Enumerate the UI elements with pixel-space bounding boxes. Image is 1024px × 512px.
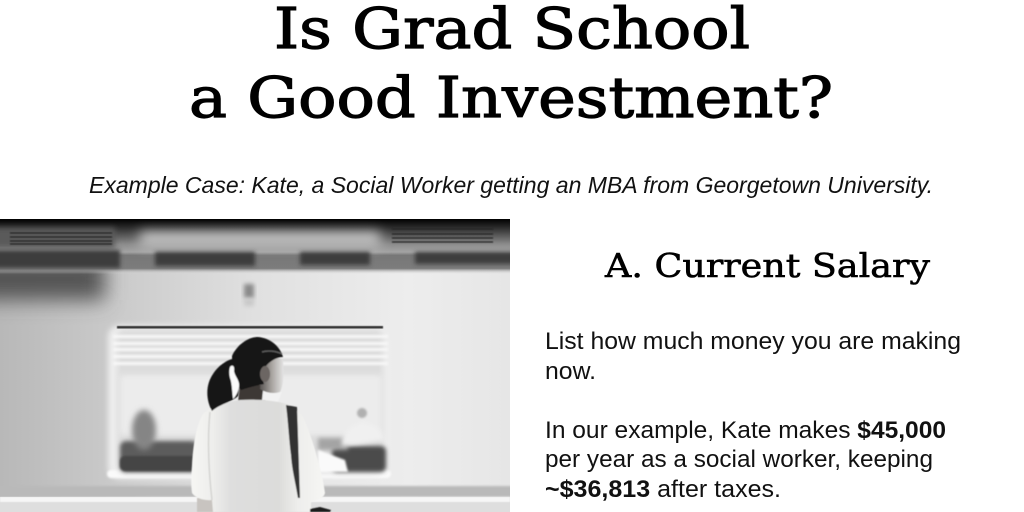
body text bbox=[545, 328, 961, 503]
lower platform edge bbox=[0, 486, 515, 497]
bag strap bbox=[286, 405, 300, 498]
section heading: A. Current Salary bbox=[604, 246, 930, 285]
sweater bbox=[191, 400, 325, 512]
roof highlight bbox=[140, 232, 380, 246]
train window bbox=[107, 325, 391, 479]
passenger right bbox=[357, 408, 367, 418]
hair bbox=[232, 337, 283, 390]
body text: now. bbox=[545, 358, 596, 385]
hair highlight bbox=[262, 351, 282, 354]
face bbox=[260, 357, 284, 393]
door sign bbox=[244, 284, 254, 298]
train roof band bbox=[0, 219, 510, 274]
white hair tie bbox=[229, 366, 239, 399]
neck bbox=[238, 384, 264, 401]
vents bbox=[10, 229, 493, 244]
ear bbox=[260, 366, 270, 382]
title bbox=[189, 0, 833, 131]
body text: List how much money you are making bbox=[545, 328, 961, 355]
sleeve seam bbox=[209, 412, 212, 500]
woman bbox=[191, 337, 331, 512]
ponytail bbox=[207, 359, 242, 411]
train wall bbox=[0, 270, 510, 497]
body text: In our example, Kate makes $45,000 bbox=[545, 417, 946, 444]
shadow upper left bbox=[0, 258, 105, 300]
photo: woman waiting on a subway platform bbox=[0, 219, 515, 512]
seats bbox=[120, 441, 198, 472]
dark roof corners bbox=[0, 228, 115, 248]
subtitle: Example Case: Kate, a Social Worker getting an MBA from Georgetown University. bbox=[89, 172, 933, 198]
bag bbox=[310, 507, 331, 512]
dark roof segments bbox=[0, 250, 515, 268]
title: a Good Investment? bbox=[189, 66, 833, 131]
passenger left bbox=[132, 410, 156, 450]
body text: ~$36,813 after taxes. bbox=[545, 476, 781, 503]
arm bbox=[197, 498, 213, 512]
body text: per year as a social worker, keeping bbox=[545, 446, 933, 473]
